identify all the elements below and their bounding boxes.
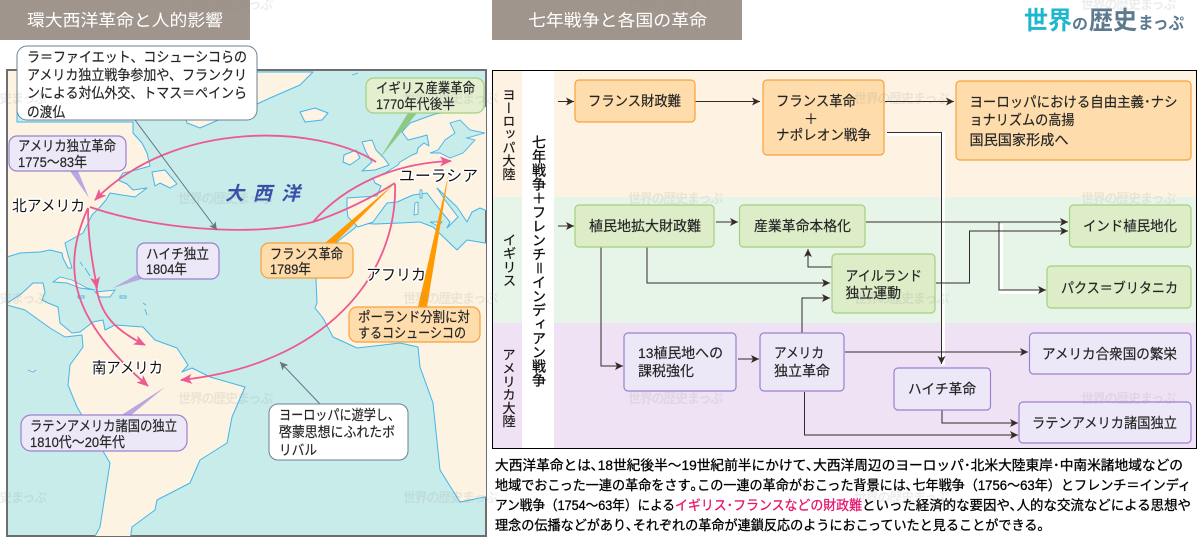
box: Latin American independence: ラテンアメリカ諸国独立 <box>1032 415 1177 431</box>
box: Ireland: アイルランド <box>846 268 922 284</box>
label: Africa: アフリカ <box>366 267 426 284</box>
box: French finance: フランス財政難 <box>588 93 681 109</box>
callout: Bolivar <box>269 404 408 460</box>
arrow: Lafayette movement <box>135 120 217 230</box>
callout: Lafayette: アメリカ独立戦争参加や、フランクリ <box>27 67 247 83</box>
box: American Revolution: 独立革命 <box>774 363 830 379</box>
box: India <box>1070 205 1191 247</box>
band: Britain <box>493 197 1196 323</box>
label: Europe continent: ヨーロッパ大陸 <box>500 88 516 182</box>
callout: Bolivar: リバル <box>279 442 317 458</box>
logo: の <box>1072 16 1088 33</box>
callout: Bolivar: ヨーロッパに遊学し、 <box>279 407 400 423</box>
watermarks: 世界の歴史まっぷ <box>854 490 949 505</box>
callout: Lafayette: ラ＝ファイエット、コシューシコらの <box>27 49 247 65</box>
watermarks: 世界の歴史まっぷ <box>403 91 498 106</box>
box: taxation <box>624 333 736 391</box>
label: South America: 南アメリカ <box>92 359 163 377</box>
box: colonial finance <box>575 205 714 247</box>
box: Pax Britannica: パクス＝ブリタニカ <box>1061 280 1178 296</box>
box: French finance <box>575 80 695 122</box>
callout: Bolivar: 啓蒙思想にふれたボ <box>279 424 395 440</box>
band: Americas <box>493 323 1196 448</box>
arrows: people movement <box>74 136 451 386</box>
callout: Industrial Revolution: 1770年代後半 <box>376 96 455 112</box>
callout: Lafayette: ンによる対仏外交、トマス＝ペインら <box>27 85 247 101</box>
arrow: Bolivar study abroad <box>280 362 320 404</box>
panel: flow chart <box>492 70 1196 448</box>
box: French Revolution: ＋ <box>804 111 818 127</box>
text block: summary: といった経済的な要因や､人的な交流などによる思想や <box>862 498 1191 513</box>
callout: French Revolution <box>261 243 353 278</box>
box: Ireland: 独立運動 <box>846 285 901 301</box>
box: Latin American independence <box>1019 402 1191 443</box>
logo <box>1024 7 1184 35</box>
text block: summary: アン戦争（1754〜63年）による <box>495 498 675 513</box>
watermarks: 世界の歴史まっぷ <box>178 391 273 406</box>
text block: summary: 理念の伝播などがあり､それぞれの革命が連鎖反応のようにおこっていたと見ることができる｡ <box>495 518 1044 533</box>
text block: summary: 大西洋革命とは､18世紀後半〜19世紀前半にかけて､大西洋周辺のヨーロッパ･北米大陸東岸･中南米諸地域などの <box>495 457 1183 473</box>
box: French Revolution <box>763 80 884 155</box>
map: land masses <box>0 70 490 540</box>
watermarks: 世界の歴史まっぷ <box>403 291 498 306</box>
callout: Poland partition: するコシューシコの <box>358 325 466 341</box>
box: American Revolution: アメリカ <box>774 345 824 361</box>
watermarks: 世界の歴史まっぷ <box>854 91 949 106</box>
box: taxation: 課税強化 <box>638 363 694 379</box>
band: Europe <box>493 71 1196 197</box>
callout: Lafayette: の渡仏 <box>27 104 65 120</box>
watermarks: 世界の歴史まっぷ <box>178 191 273 206</box>
callout: French Revolution: 1789年 <box>270 261 311 277</box>
box: European liberalism: ョナリズムの高揚 <box>970 112 1074 128</box>
watermarks: 世界の歴史まっぷ <box>628 191 723 206</box>
box: Haitian Revolution <box>894 368 990 410</box>
callout: Haiti independence: 1804年 <box>146 261 187 277</box>
heading: right: 七年戦争と各国の革命 <box>528 11 708 30</box>
callout: Latin American independence <box>21 415 187 451</box>
panel: Atlantic map <box>0 46 490 540</box>
box: American Revolution <box>760 333 844 391</box>
box: European liberalism: ヨーロッパにおける自由主義･ナシ <box>970 94 1178 110</box>
label: Seven Years War: 七年戦争＋フレンチ＝インディアン戦争 <box>531 135 547 387</box>
label: Eurasia: ユーラシア <box>399 168 478 185</box>
callout: American Revolution: 1775〜83年 <box>18 154 87 170</box>
box: Haitian Revolution: ハイチ革命 <box>908 381 976 397</box>
box: French Revolution: ナポレオン戦争 <box>776 127 871 143</box>
box: Pax Britannica <box>1047 266 1191 308</box>
logo: 世界 <box>1024 7 1072 35</box>
watermarks: 世界の歴史まっぷ <box>628 391 723 406</box>
text block: summary <box>495 457 1191 533</box>
label: Atlantic Ocean: 大西洋 <box>225 183 303 205</box>
label: Americas continent: アメリカ大陸 <box>500 348 516 429</box>
connectors <box>558 102 1068 435</box>
logo: まっぷ <box>1138 14 1184 33</box>
watermarks: 世界の歴史まっぷ <box>854 291 949 306</box>
callout: Industrial Revolution <box>366 78 484 113</box>
logo: 歴史 <box>1089 7 1137 35</box>
box: taxation: 13植民地への <box>638 345 723 361</box>
box: US prosperity: アメリカ合衆国の繁栄 <box>1042 346 1177 362</box>
box: French Revolution: フランス革命 <box>776 93 856 109</box>
wedge pointers <box>70 113 449 416</box>
callout: Poland partition <box>349 307 480 342</box>
heading: right <box>492 0 742 40</box>
callout: American Revolution: アメリカ独立革命 <box>18 138 116 154</box>
callout: American Revolution <box>9 136 126 171</box>
callout: Poland partition: ポーランド分割に対 <box>358 309 470 325</box>
label: Britain: イギリス <box>500 233 516 287</box>
callout: French Revolution: フランス革命 <box>270 246 343 262</box>
heading: left: 環大西洋革命と人的影響 <box>27 11 223 30</box>
heading: left <box>0 0 250 40</box>
text block: summary: 地域でおこった一連の革命をさす｡この一連の革命がおこった背景には､七年戦争（1756〜63年）とフレンチ＝インディ <box>495 477 1191 493</box>
watermarks: 世界の歴史まっぷ <box>403 490 498 505</box>
box: Industrial Revolution <box>740 205 865 247</box>
box: US prosperity <box>1030 333 1191 374</box>
box: Ireland <box>832 254 935 313</box>
box: India: インド植民地化 <box>1083 218 1177 234</box>
callout: Latin American independence: 1810代〜20年代 <box>30 434 125 450</box>
box: Industrial Revolution: 産業革命本格化 <box>754 218 851 234</box>
text block: summary: イギリス･フランスなどの財政難 <box>675 498 862 513</box>
box: European liberalism <box>956 81 1191 160</box>
callout: Haiti independence <box>137 243 219 279</box>
callout: Lafayette <box>17 46 257 120</box>
watermarks: 世界の歴史まっぷ <box>1081 191 1176 206</box>
box: European liberalism: 国民国家形成へ <box>970 132 1068 148</box>
callout: Industrial Revolution: イギリス産業革命 <box>376 80 475 96</box>
callout: Latin American independence: ラテンアメリカ諸国の独立 <box>30 418 177 434</box>
label: North America: 北アメリカ <box>12 197 85 215</box>
box: colonial finance: 植民地拡大財政難 <box>589 218 701 234</box>
watermarks: 世界の歴史まっぷ <box>1081 391 1176 406</box>
callout: Haiti independence: ハイチ独立 <box>146 246 209 262</box>
